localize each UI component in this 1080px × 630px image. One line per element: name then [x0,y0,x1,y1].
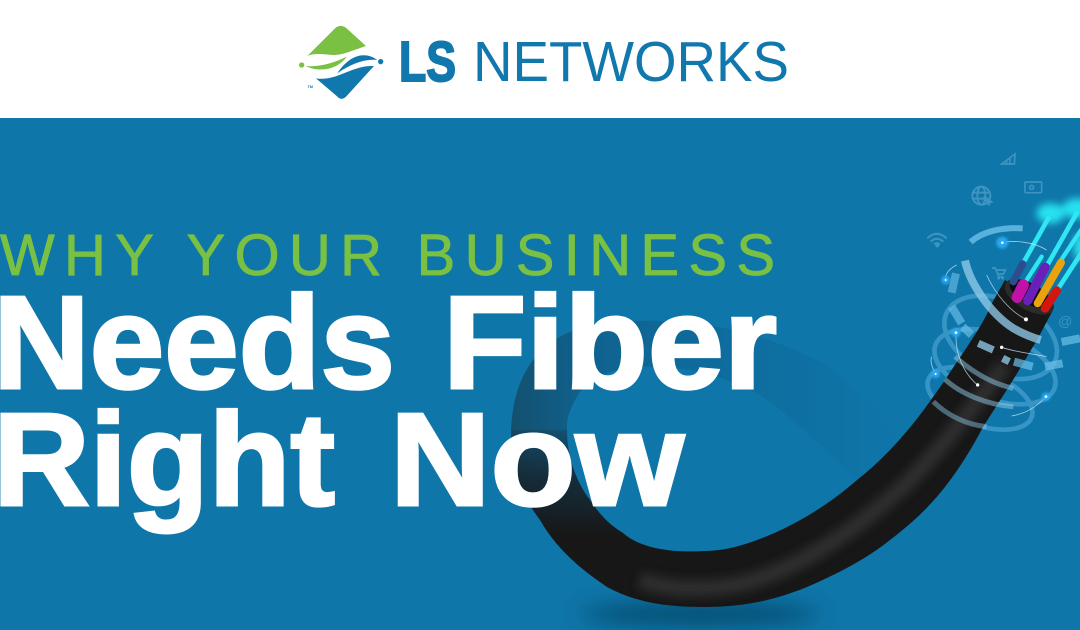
glowing nodes [931,237,1050,401]
headline line 2: Right [0,386,335,533]
cable highlight [640,365,1005,588]
bands over the cable [933,261,1041,427]
icon: shopping cart [992,268,1005,279]
icon: wifi [927,234,947,246]
logo wordmark: NETWORKS [473,30,789,94]
headline line 1 [0,269,777,416]
cable: right sweeping section [703,280,1053,607]
coloured fibre tubes [1013,263,1061,308]
logo icon: diamond with swooshes: TM [308,85,313,89]
faded loop of cable behind the title [511,321,900,607]
icon: signal bars [1002,154,1015,164]
white header band [0,0,1080,118]
beam glow [1037,198,1080,260]
headline line 1: Needs [0,269,395,416]
data rings behind the cable [919,279,1070,442]
floating icons [927,154,1072,329]
thin light arcs [931,241,1047,416]
headline line 1: Fiber [443,269,777,416]
logo wordmark: LS [399,30,456,94]
logo icon: diamond with swooshes [299,26,383,99]
cyan light beams [1024,213,1080,288]
cable collar and end ellipse [999,271,1060,322]
icon: globe with cursor [972,187,991,205]
fiber optic cable [511,280,1053,607]
logo: LS Networks [299,26,789,99]
headline line 2 [0,386,684,533]
fiber end illustration [927,154,1080,427]
ring arcs around the cable [971,228,1023,242]
icon: at sign: @ [1058,313,1072,329]
title [0,223,777,533]
cable shadow [580,604,820,624]
subtitle: Why your business: WHY YOUR BUSINESS [0,223,775,288]
cable: left rising section [511,430,704,607]
headline line 2: Now [390,386,684,533]
icon: camera [1025,182,1042,193]
data rings segments [952,228,1080,367]
